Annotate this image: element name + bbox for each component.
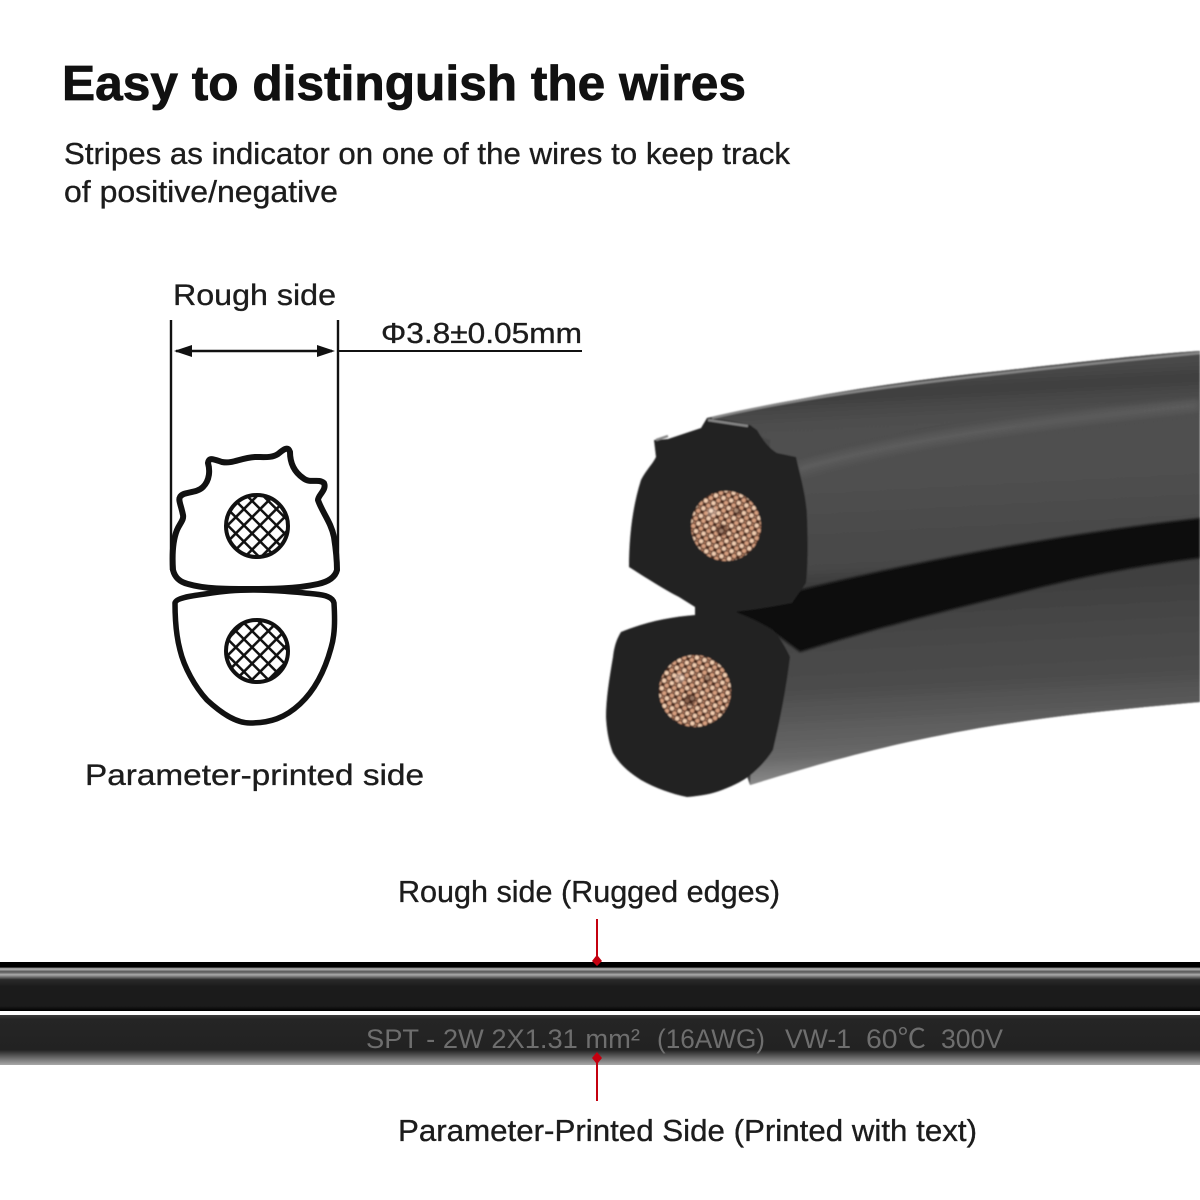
conductor: lower [226, 620, 288, 682]
printed cable text: SPT - 2W 2X1.31 mm² [366, 1024, 640, 1054]
cable strip: printed side [0, 1015, 1200, 1065]
title: Easy to distinguish the wires [62, 57, 746, 111]
printed cable text [366, 1024, 1003, 1054]
printed cable text: 300V [941, 1024, 1003, 1054]
panel: cross-section diagram [85, 279, 582, 792]
arrow: rough side [592, 919, 602, 966]
dimension label: Φ3.8±0.05mm [381, 318, 582, 350]
groove shadow [730, 518, 1200, 652]
cable strip: rough side [0, 962, 1200, 1011]
upper wire cross-section [629, 418, 808, 612]
arrow: printed side [592, 1052, 602, 1101]
label: parameter-printed side: Parameter-printed side [85, 759, 424, 792]
subtitle text block: Stripes as indicator on one of the wires to keep track [64, 136, 791, 171]
wire outline: rough side [173, 449, 337, 589]
label: rough side: Rough side [173, 279, 336, 312]
panel: cable photo [606, 351, 1200, 797]
label: parameter-printed side printed with text: Parameter-Printed Side (Printed with text) [398, 1113, 977, 1148]
subtitle text block: of positive/negative [64, 174, 338, 209]
wire outline: printed side [175, 590, 335, 723]
copper strands: lower [659, 655, 731, 727]
copper strands: upper [691, 491, 761, 561]
base cable body [700, 351, 1200, 785]
ridge lines [796, 405, 1200, 470]
printed cable text: VW-1 [785, 1024, 851, 1054]
upper wire body [707, 351, 1200, 610]
printed cable text: (16AWG) [657, 1024, 765, 1054]
dimension lines and arrow [171, 320, 582, 570]
conductor: upper [226, 495, 288, 557]
label: rough side rugged edges: Rough side (Rugged edges) [398, 874, 780, 909]
subtitle text block [64, 136, 791, 209]
lower wire cross-section [606, 606, 790, 797]
lower wire body [750, 550, 1200, 785]
printed cable text: 60℃ [866, 1024, 926, 1054]
top edge highlight [656, 353, 1200, 440]
